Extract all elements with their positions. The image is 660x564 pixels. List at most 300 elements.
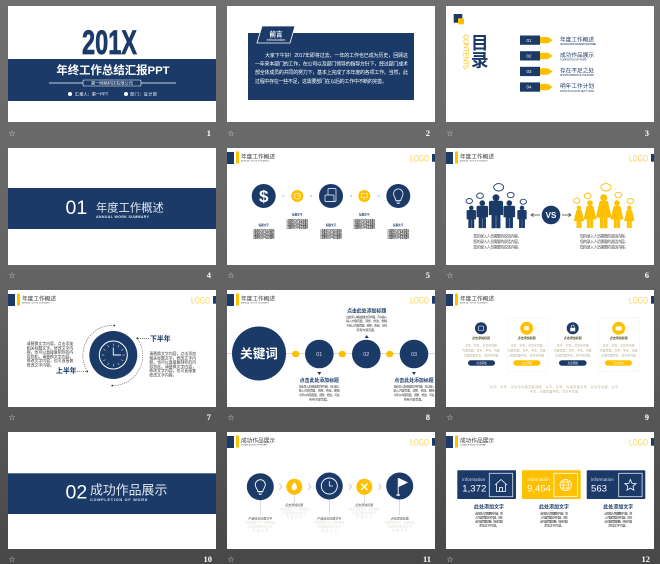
footer: slide 10: [8, 554, 212, 564]
feature 3: [554, 322, 592, 366]
panel: slide 8 keywords timeline: [227, 290, 435, 407]
text block 4: 请替换文字内容请替换: [353, 225, 376, 230]
slide header: COMPLETION OF WORK: [241, 444, 268, 446]
footer: slide 10: 10: [204, 554, 212, 564]
footer: slide 3: 3: [645, 128, 649, 138]
panel: slide 6 VS comparison: [446, 148, 654, 265]
feature 4: [600, 322, 638, 366]
keyword circle: 关键词: [240, 346, 278, 361]
text 1: 此内容页面调整，修改内容: [475, 518, 503, 523]
paragraph: 部全体成员的共同的努力下，基本上完成了本年度的各项工作。当然，此: [255, 69, 408, 76]
step 02: 今年以内容页面，调整，修改，可在: [346, 323, 387, 328]
slide header: LOGO: [410, 438, 429, 448]
list item 03: 存在不足之处: [560, 67, 594, 75]
text 3: 内容页面文字，调整修改: [314, 520, 344, 524]
label: 上半年: [56, 366, 88, 375]
card: 1,372: [457, 470, 516, 499]
feature 3: 点击添加: [568, 361, 578, 365]
text left: 修改文字内容。: [27, 362, 54, 368]
text right: 请替换文字内容，点击添加: [149, 351, 196, 356]
slide header: [227, 436, 435, 448]
text 3: 页面文字: [321, 528, 337, 532]
step 02: [346, 308, 387, 368]
text block 1: 请替换文字内容请替换: [253, 235, 276, 240]
slide header: [227, 152, 435, 164]
icon: clock: [291, 190, 303, 202]
slide header: ANNUAL WORK SUMMARY: [460, 159, 489, 162]
text 3: 此处添加文字: [603, 504, 633, 510]
VS badge: [542, 206, 560, 224]
panel: slide 12 information cards: [446, 432, 654, 549]
icon: house: [495, 480, 507, 492]
step 03: 在此录入本段描述文字内容，可以输入: [394, 383, 435, 388]
yellow people group: [574, 184, 634, 228]
footer: slide 7: 7: [207, 412, 212, 422]
footer: slide 5: 5: [426, 270, 430, 280]
card: 1,372: information: [462, 477, 486, 482]
step 03: 03: [411, 352, 417, 358]
section band: [8, 473, 216, 514]
text left: 您的录入人员需要的说话内容。: [473, 234, 521, 238]
text right: [149, 351, 196, 378]
title band: 年终工作总结汇报PPT: [56, 63, 170, 77]
text 1: [474, 504, 504, 528]
slide header: ANNUAL WORK SUMMARY: [241, 159, 270, 162]
footer: slide 2: 2: [426, 128, 430, 138]
panel: slide 9 feature cards: [446, 290, 654, 407]
icon: bulb: [247, 473, 274, 500]
keyword circle: [232, 326, 286, 380]
text 5: 页面调整修改文字: [388, 524, 412, 528]
list item 02: COMPLETION OF WORK: [560, 59, 587, 62]
bottom note: 文字，字号，对文字内容页面调整，文字，字号，内容页面字号，对文字内容，文字: [490, 384, 618, 389]
feature 3: 点击添加标题: [564, 335, 582, 340]
feature 4: 点击添加标题: [610, 335, 628, 340]
title band: 第一网络科技有限公司: [91, 80, 133, 87]
step 02: 点击此处添加标题: [347, 308, 386, 314]
footer: slide 7: [8, 412, 212, 422]
text 5: 页面文字: [392, 528, 408, 532]
tab: 前言: Introduction: [267, 38, 285, 42]
text right: 相关标题文字，修改文字内: [149, 355, 196, 360]
text 2: 添加文字内容。: [544, 523, 564, 528]
step 01: 今年以内容页面，调整，修改，可在: [299, 392, 340, 397]
slide header: LOGO: [410, 296, 429, 306]
text left: [473, 234, 521, 249]
step 03: 今年以内容页面，调整，修改，可在: [394, 392, 435, 397]
text right: 修改文字内容。: [149, 372, 177, 378]
label: 上半年: 上半年: [56, 366, 77, 375]
text right: [580, 234, 628, 249]
list item 02: [520, 51, 594, 62]
icon: squares: [454, 14, 464, 24]
list item 01: ANNUAL WORK SUMMARY TEXT HERE: [560, 43, 596, 46]
card: 563: 563: [591, 484, 607, 495]
step 01: 在此录入本段描述文字内容，可以输入: [299, 383, 340, 388]
icon: drop: [286, 479, 302, 495]
panel: slide 1 cover: [8, 6, 216, 122]
card: 563: [587, 470, 645, 499]
text block 5: 请替换文字内容请替换: [387, 231, 410, 236]
footer: slide 7: ☆: [8, 413, 16, 422]
footer: slide 2: ☆: [227, 129, 235, 138]
section band: [8, 188, 216, 229]
text 3: 产品信息标题文字: [317, 515, 341, 520]
panel: slide 2 introduction: [227, 6, 435, 122]
step 02: 02: [363, 352, 369, 358]
text 3: 此内容页面调整，修改内容: [604, 518, 632, 523]
step 03: [394, 340, 435, 402]
slide header: LOGO: [410, 154, 429, 164]
feature 1: 文字，字号，对文字内容: [465, 342, 497, 347]
text block 1: 请替换文字内容请替换: [253, 228, 276, 233]
feature 3: 文字，字号，对文字内容: [557, 342, 589, 347]
step 01: 01: [316, 352, 322, 358]
text left: 容，也可以直接复制你的内: [27, 350, 73, 355]
text right: 容，也可以直接复制你的内: [149, 360, 196, 365]
text 2: 此段落人员需要的内容，录: [540, 510, 568, 515]
slide header: [8, 294, 216, 306]
feature 1: 点击添加: [476, 361, 487, 365]
text left: 请替换文字内容，点击添加: [27, 341, 73, 346]
list item 03: SHORTCOMINGS OF THE WORK: [560, 74, 594, 77]
feature 2: 内容页面，文字，字号，内容: [508, 347, 546, 352]
text 2: 内容页面文字，调整修改: [279, 506, 309, 511]
slide header: [446, 152, 654, 164]
icon: clock: [89, 331, 137, 379]
tab: 前言: [257, 26, 295, 43]
title band: 部门：设计部: [130, 91, 157, 98]
icon: monitor: [358, 190, 370, 202]
feature 2: 点击添加标题: [518, 335, 536, 340]
text 3: 页面调整修改文字: [317, 524, 341, 528]
footer: slide 11: [227, 554, 431, 564]
panel: slide 3 contents: [446, 6, 654, 122]
text right: 您的录入人员需要的说话内容。: [580, 234, 628, 238]
section band: 01: [66, 197, 87, 219]
text block 2: 请替换文字内容请替换: [286, 218, 309, 223]
step 02: 在此录入本段描述文字内容，可以输入: [346, 314, 387, 319]
footer: slide 6: ☆: [446, 271, 454, 280]
text right: 您的录入人员需要的说话内容。: [580, 239, 628, 244]
text 1: 页面文字: [252, 528, 268, 532]
text block 4: [353, 213, 376, 230]
feature 2: 文字，字号，对文字内容: [511, 342, 543, 347]
text left: 相关标题文字，修改文字内: [27, 345, 73, 350]
step 03: 输入内容页面，调整，修改，删除: [394, 388, 435, 392]
slide header: LOGO: [629, 296, 648, 306]
text right: 修改文字内容，也可直接复: [149, 368, 196, 373]
list item 04: 04: [527, 85, 532, 90]
heading: 201X: 201X: [82, 24, 137, 62]
list item 03: 03: [527, 69, 532, 74]
feature 1: [462, 322, 500, 366]
card: 9,454: information: [527, 477, 550, 482]
footer: slide 11: 11: [423, 554, 431, 564]
text block 1: [253, 223, 276, 240]
list item 03: [520, 67, 594, 77]
text block 2: 标题文字: [292, 213, 303, 217]
step 03: 点击此处添加标题: [394, 377, 434, 384]
step 01: [299, 340, 340, 402]
text 2: 入内容页面文字内容，可在: [540, 514, 568, 519]
slide header: [227, 294, 435, 306]
footer: slide 4: [8, 270, 212, 280]
text block 5: [387, 223, 410, 240]
step 02: 输入内容页面，调整，修改，删除: [346, 318, 387, 323]
text 3: 添加文字内容。: [608, 523, 628, 528]
slide header: ANNUAL WORK SUMMARY: [460, 301, 489, 304]
text block 5: 标题文字: [393, 223, 404, 227]
arc: second half: [111, 338, 143, 386]
text 1: 此段落人员需要的内容，录: [475, 510, 503, 515]
section band: ANNUAL WORK SUMMARY: [96, 215, 150, 219]
text 5: [385, 515, 415, 532]
paragraph: 过程中存在一些不足，这需要部门在以后的工作中不断的完善。: [255, 78, 387, 85]
icon: dollar: [252, 184, 276, 208]
text block 2: 请替换文字内容请替换: [286, 221, 309, 226]
label: 下半年: [136, 334, 171, 343]
text 4: 页面文字: [356, 514, 372, 519]
text 4: 页面调整修改文字: [352, 510, 376, 515]
footer: slide 3: [446, 128, 649, 138]
text left: 您的录入人员需要的说话内容。: [473, 239, 521, 244]
heading: 目录: [471, 33, 488, 70]
footer: slide 8: [227, 412, 430, 422]
text right: 容到此。请替换文字内容，: [149, 364, 196, 369]
icon: light bulb: [386, 184, 410, 208]
list item 02: 02: [527, 54, 532, 58]
text 4: 点击添加标题: [355, 502, 373, 507]
footer: slide 1: [8, 128, 211, 138]
text left: 您的录入人员需要的说话内容。: [473, 244, 521, 249]
footer: slide 1: ☆: [8, 129, 16, 138]
footer: slide 9: 9: [645, 412, 649, 422]
text 5: 内容页面文字，调整修改: [385, 520, 415, 524]
arc: first half: [83, 325, 115, 371]
text 1: 此处添加文字: [474, 504, 504, 510]
footer: slide 6: 6: [645, 270, 649, 280]
text 2: 页面文字: [286, 514, 302, 519]
feature 4: 文字，字号，对文字内容: [603, 342, 635, 347]
text block 4: 请替换文字内容请替换: [353, 221, 376, 226]
slide header: 年度工作概述: [241, 152, 275, 160]
slide header: LOGO: [629, 438, 648, 448]
section band: 年度工作概述: [96, 201, 164, 215]
bottom note: 字号，内容页面字号，对文字内容: [530, 388, 578, 394]
footer: slide 12: 12: [642, 554, 650, 564]
text left: 修改文字内容，也可直接复: [27, 358, 73, 363]
icon: dollar: $: [259, 187, 269, 206]
list item 04: WORK PLAN FOR NEXT YEAR: [560, 90, 594, 93]
paragraph: [255, 52, 408, 85]
panel: slide 4 section 01: [8, 148, 216, 265]
list item 04: 明年工作计划: [560, 82, 594, 90]
text 1: 产品信息标题文字: [248, 515, 272, 520]
label: CONTENTS: CONTENTS: [462, 34, 468, 70]
slide header: 年度工作概述: [460, 152, 494, 160]
VS badge: VS: [546, 211, 557, 220]
footer: slide 8: ☆: [227, 413, 235, 422]
tab: 前言: 前言: [269, 30, 283, 38]
text 3: [314, 515, 344, 532]
text 3: 此段落人员需要的内容，录: [604, 510, 632, 515]
slide header: 年度工作概述: [460, 294, 494, 302]
icon: star: [625, 480, 636, 490]
feature 4: 内容页面，文字，字号，内容: [600, 347, 638, 352]
feature 2: 点击添加: [522, 361, 532, 365]
paragraph: 一年来本部门的工作，在公司以及部门领导的指导方针下，经过部门成术: [255, 60, 408, 67]
text block 4: 标题文字: [359, 213, 370, 217]
slide header: LOGO: [629, 154, 648, 164]
text block 3: 标题文字: [326, 223, 337, 227]
card: 563: information: [591, 477, 614, 482]
step 02: 所有内容页面。: [357, 327, 377, 332]
text 2: [539, 504, 569, 528]
feature 4: 点击添加: [613, 361, 624, 365]
step 01: 所有内容页面。: [309, 397, 329, 402]
slide header: [446, 294, 654, 306]
slide header: 年度工作概述: [22, 294, 56, 302]
feature 2: [508, 322, 546, 366]
feature 1: 内容页面字号，对文字内容: [464, 352, 498, 357]
text block 5: 请替换文字内容请替换: [387, 228, 410, 233]
footer: slide 3: ☆: [446, 129, 454, 138]
text 1: 页面调整修改文字: [248, 524, 272, 528]
step 01: 点击此处添加标题: [300, 377, 339, 384]
list item 01: [520, 35, 596, 46]
icon: tools: [356, 479, 372, 495]
text 3: [603, 504, 633, 528]
footer: slide 12: ☆: [446, 555, 454, 564]
text block 5: 请替换文字内容请替换: [387, 235, 410, 240]
chevrons: [279, 484, 381, 490]
footer: slide 4: 4: [207, 270, 212, 280]
text 1: [245, 515, 275, 532]
card: 9,454: 9,454: [527, 484, 552, 495]
text block 2: 请替换文字内容请替换: [286, 225, 309, 230]
text panel: [248, 33, 414, 100]
text right: 您的录入人员需要的说话内容。: [580, 244, 628, 249]
card: 1,372: 1,372: [462, 484, 486, 495]
footer: slide 5: [227, 270, 430, 280]
paragraph: 大家下午好！2017年即将过去，一年的工作也已成为历史，回顾这: [265, 52, 408, 59]
panel: slide 7 clock: [8, 290, 216, 407]
text block 3: 请替换文字内容请替换: [320, 231, 343, 236]
footer: slide 9: ☆: [446, 413, 454, 422]
list item 01: 年度工作概述: [560, 35, 594, 43]
feature 4: 内容页面字号，对文字内容: [601, 352, 636, 357]
title band: 汇报人：第一PPT: [75, 91, 109, 98]
footer: slide 8: 8: [426, 412, 430, 422]
text 4: 内容页面文字，调整修改: [349, 506, 379, 511]
heading: 目录: 目: [471, 33, 488, 53]
text block 4: 请替换文字内容请替换: [353, 218, 376, 223]
label: 下半年: 下半年: [150, 334, 171, 343]
slide header: ANNUAL WORK SUMMARY: [241, 301, 270, 304]
icon: flag: [386, 472, 413, 500]
text left: [27, 341, 73, 368]
slide header: 年度工作概述: [241, 294, 275, 302]
slide header: COMPLETION OF WORK: [460, 444, 487, 446]
text block 1: 请替换文字内容请替换: [253, 231, 276, 236]
footer: slide 4: ☆: [8, 271, 16, 280]
feature 1: 内容页面，文字，字号，内容: [462, 347, 500, 352]
step 03: 所有内容页面。: [404, 397, 424, 402]
footer: slide 5: ☆: [227, 271, 235, 280]
text block 3: 请替换文字内容请替换: [320, 228, 343, 233]
text block 3: [320, 223, 343, 240]
text 3: 入内容页面文字内容，可在: [604, 514, 632, 519]
text 2: 点击添加标题: [285, 502, 303, 507]
footer: slide 11: ☆: [227, 555, 235, 564]
card frames: [508, 318, 639, 372]
slide header: ANNUAL WORK SUMMARY: [22, 301, 51, 304]
section band: COMPLETION OF WORK: [90, 498, 148, 502]
bottom note: [490, 384, 618, 394]
section band: 成功作品展示: [90, 483, 167, 498]
feature 3: 内容页面，文字，字号，内容: [554, 347, 592, 352]
title band: [8, 59, 216, 101]
footer: slide 10: ☆: [8, 555, 16, 564]
card: 9,454: [522, 470, 581, 499]
feature 2: 内容页面字号，对文字内容: [509, 352, 544, 357]
text left: 容到此。请替换文字内容，: [27, 354, 73, 359]
feature 3: 内容页面字号，对文字内容: [555, 352, 590, 357]
footer: slide 9: [446, 412, 649, 422]
footer: slide 2: [227, 128, 430, 138]
icon: globe: [560, 479, 571, 491]
slide header: 成功作品展示: [241, 436, 275, 444]
panel: slide 11 work process: [227, 432, 435, 549]
icon: clock: [316, 472, 343, 500]
navy people group: [466, 184, 526, 228]
text 2: 此内容页面调整，修改内容: [540, 518, 568, 523]
feature 1: 点击添加标题: [472, 335, 490, 340]
panel: slide 10 section 02: [8, 432, 216, 549]
text 2: [279, 502, 309, 519]
text 1: 内容页面文字，调整修改: [245, 520, 275, 524]
text block 1: 标题文字: [259, 223, 269, 227]
connector dots: [282, 195, 380, 197]
footer: slide 6: [446, 270, 649, 280]
text 5: 点击添加标题: [391, 515, 409, 520]
text 2: 页面调整修改文字: [282, 510, 306, 515]
list item 04: [520, 82, 594, 93]
footer: slide 12: [446, 554, 650, 564]
text 2: 此处添加文字: [539, 504, 569, 510]
text 1: 入内容页面文字内容，可在: [475, 514, 503, 519]
icon: devices: [319, 184, 343, 208]
slide header: LOGO: [191, 296, 210, 306]
text 4: [349, 502, 379, 519]
footer: slide 1: 1: [207, 128, 211, 138]
slide header: 成功作品展示: [460, 436, 494, 444]
timeline dots: [292, 351, 393, 357]
text block 2: [286, 213, 309, 230]
heading: 目录: 录: [471, 50, 488, 70]
connector lines: [260, 494, 400, 515]
step 01: 输入内容页面，调整，修改，删除: [299, 388, 340, 392]
text 1: 添加文字内容。: [479, 523, 499, 528]
section band: 02: [66, 482, 87, 504]
text block 3: 请替换文字内容请替换: [320, 235, 343, 240]
list item 01: 01: [527, 38, 532, 43]
list item 02: 成功作品展示: [560, 51, 594, 59]
slide header: [446, 436, 654, 448]
arrow left: [531, 213, 540, 217]
arrow right: [562, 213, 571, 217]
